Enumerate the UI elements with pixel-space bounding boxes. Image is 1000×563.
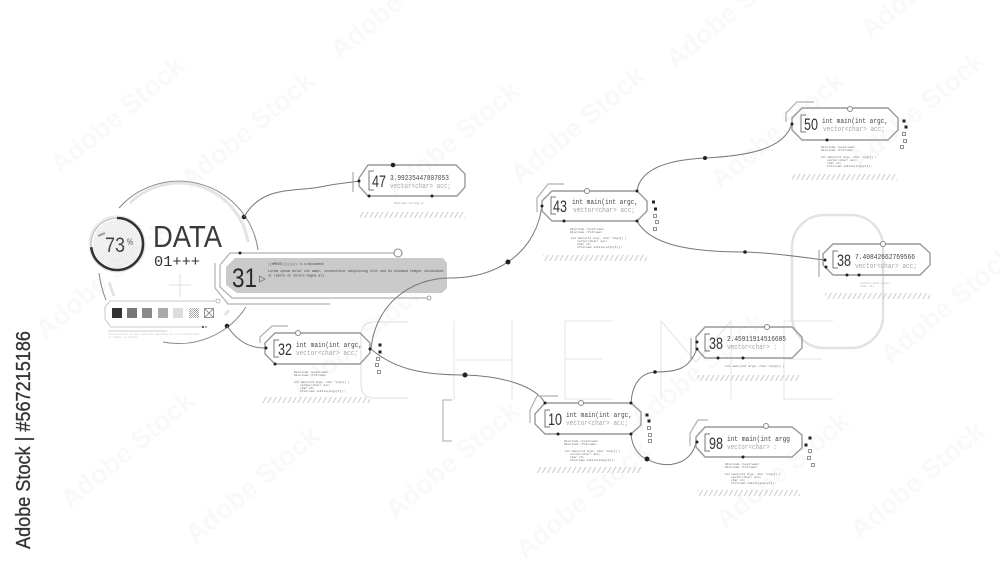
watermark: Adobe Stock pattern: Adobe Stock [845, 415, 991, 545]
card: 47 [353, 163, 465, 218]
gauge: 73 percent: 73 [105, 234, 125, 257]
corner bracket [690, 420, 708, 446]
hatch [792, 174, 897, 180]
code snippet: vector<char> acc; [860, 281, 891, 285]
hatch [697, 490, 800, 496]
panel text [268, 262, 444, 278]
code snippet [564, 439, 621, 462]
code snippet: ifstream inFile(argv[1]); [731, 481, 776, 485]
corner bracket [530, 396, 558, 423]
triangle marker [260, 276, 265, 282]
hatch [825, 293, 930, 299]
connector nodes [462, 156, 747, 462]
code snippet: #include <iostream> [821, 145, 855, 149]
code snippet: #include <iostream> [294, 370, 328, 374]
card: 32 [260, 326, 382, 403]
number 31: 31 [232, 263, 257, 293]
card: 50 [786, 102, 908, 180]
corner bracket [260, 326, 288, 343]
bracket [705, 434, 710, 451]
bracket [274, 340, 279, 357]
vector text: vector<char> acc; [823, 126, 885, 134]
hub nodes [225, 215, 246, 328]
number: 98 [709, 434, 723, 453]
code snippet [294, 370, 350, 393]
nodes [696, 440, 744, 458]
main text: int main(int argc, [566, 412, 632, 420]
code snippet [725, 462, 781, 485]
code snippet: vector<char> acc; [827, 158, 858, 162]
code snippet [860, 281, 891, 288]
stock credit text: Adobe Stock | #567215186 [13, 331, 35, 549]
corner bracket [786, 102, 814, 122]
card: 43 [537, 184, 658, 261]
panel text: Lorem ipsum dolor sit amet, consectetur adipiscing elit sed do eiusmod tempor incididunt [268, 269, 444, 274]
bracket mark [443, 400, 452, 441]
code snippet: char ch; [577, 242, 592, 246]
code snippet: int main(int argc, char *argv[] ) [725, 472, 781, 476]
code snippet: char ch; [300, 386, 315, 390]
hatch [543, 255, 647, 261]
bracket [551, 197, 556, 214]
heading: DATA: DATA [153, 219, 222, 254]
tick [690, 338, 692, 360]
colour palette: ut labore et dolore [108, 335, 138, 339]
colour palette: Lorem ipsum dolor sit amet, consectetur adipiscing elit sed do eiusmod tempor [108, 332, 200, 336]
status squares [646, 414, 652, 442]
letter H [454, 321, 512, 400]
card: 98 [690, 420, 814, 496]
panel text: ut labore et dolore magna ali. [268, 274, 326, 278]
hatch [537, 467, 642, 473]
watermark: Adobe Stock pattern: Adobe Stock [505, 60, 651, 190]
watermark: Adobe Stock pattern: Adobe Stock [55, 385, 201, 515]
number: 38 [709, 334, 723, 353]
card: 10 [530, 396, 652, 473]
code snippet: vector<char> acc; [570, 452, 601, 456]
letter M [661, 321, 731, 399]
number: 10 [548, 410, 562, 429]
panel: data hub [89, 181, 258, 344]
letter E [565, 321, 613, 399]
value text: 2.45911914516605 [727, 336, 786, 344]
watermark: Adobe Stock pattern: Adobe Stock [510, 435, 656, 563]
number: 43 [553, 197, 567, 216]
vector text: vector<char> acc; [573, 207, 635, 215]
main text: int main(int argc, [296, 342, 362, 350]
watermark: Adobe Stock pattern: Adobe Stock [705, 65, 851, 195]
code snippet: vector<char> acc; [577, 239, 608, 243]
bracket [801, 115, 806, 132]
letter O [792, 215, 883, 348]
number: 50 [804, 115, 818, 134]
panel outline [215, 253, 427, 304]
code snippet: #include <iostream> [564, 439, 598, 443]
bracket [545, 410, 550, 427]
status squares [804, 436, 814, 466]
code snippet: #include <iostream> [725, 462, 759, 466]
watermark: Adobe Stock pattern: Adobe Stock [380, 75, 526, 205]
nodes [544, 402, 632, 436]
panel: 31 [215, 249, 447, 304]
code snippet: #include <string.h> [394, 201, 424, 205]
bracket [705, 334, 710, 351]
code snippet: int main(int argc, char *argv[] ) [565, 449, 621, 453]
hub ring [99, 181, 258, 344]
nodes [790, 122, 828, 142]
code snippet: int main(int argc, char *argv[] ) [294, 380, 350, 384]
code snippet: #include <fstream> [725, 465, 758, 469]
colour palette [105, 299, 220, 339]
vector text: vector<char> acc; [566, 420, 628, 428]
hatch [262, 397, 370, 403]
number: 32 [278, 340, 292, 359]
code snippet: #include <fstream> [821, 148, 854, 152]
vector text: vector<char> : [727, 444, 777, 452]
code snippet: char ch; [827, 161, 842, 165]
bracket [369, 171, 374, 190]
code snippet: #include <fstream> [564, 442, 597, 446]
code snippet: char ch; [731, 478, 746, 482]
value text: 3.99235447807053 [390, 175, 449, 183]
panel grey body [226, 258, 447, 293]
main text: int main(int argc, [822, 118, 888, 126]
code snippet [821, 145, 877, 168]
value text: 7.40842662769566 [855, 254, 915, 262]
code snippet: #include <iostream> [570, 227, 604, 231]
vector text: vector<char> : [727, 344, 777, 352]
vector text: vector<char> acc; [855, 263, 917, 271]
watermark: Adobe Stock pattern: Adobe Stock [175, 65, 321, 195]
nodes [696, 340, 744, 360]
main text: int main(int argg [727, 436, 790, 444]
vector text: vector<char> acc; [390, 183, 451, 191]
watermark: Adobe Stock pattern: Adobe Stock [710, 405, 856, 535]
nodes [264, 346, 372, 366]
code snippet: ifstream inFile(argv[1]); [827, 164, 872, 168]
corner bracket [537, 184, 564, 212]
status squares [652, 200, 658, 230]
card: 38 upper [819, 242, 930, 299]
code snippet: int main(int argc, char *argv[] ) [725, 364, 785, 368]
panel text: ||HMODE||||||// x.x/document [268, 262, 324, 267]
number: 38 [837, 251, 851, 270]
connector curves [227, 123, 825, 465]
hatch [360, 212, 465, 218]
gauge: 73 percent: % [127, 237, 133, 247]
code snippet: vector<char> acc; [731, 475, 762, 479]
main text: int main(int argc, [572, 199, 638, 207]
code snippet: vector<char> acc; [300, 383, 331, 387]
watermark: Adobe Stock pattern: Adobe Stock [30, 215, 176, 345]
tick [352, 172, 354, 192]
letter C [361, 322, 408, 398]
panel nodes [238, 249, 431, 300]
number: 47 [372, 172, 386, 191]
code snippet: ifstream inFile(argv[1]); [300, 389, 345, 393]
vector text: vector<char> acc; [296, 350, 358, 358]
code snippet: #include <fstream> [570, 230, 603, 234]
letter E right [784, 321, 833, 399]
code snippet: ifstream inFile(argv[1]); [570, 458, 615, 462]
watermark: Adobe Stock pattern: Adobe Stock [180, 420, 326, 550]
nodes [358, 163, 434, 198]
status squares [900, 120, 908, 148]
card: 38 lower [691, 324, 802, 381]
code snippet: char ch; [570, 455, 585, 459]
watermark: Adobe Stock pattern: Adobe Stock [285, 275, 431, 405]
watermark: Adobe Stock pattern: Adobe Stock [845, 45, 991, 175]
bracket [833, 251, 838, 268]
code snippet: #include <fstream> [294, 373, 327, 377]
code snippet: char ch; [860, 284, 875, 288]
code snippet: ifstream inFile(argv[1]); [577, 245, 622, 249]
watermark: Adobe Stock pattern: Adobe Stock [625, 305, 771, 435]
subheading: 01+++: 01+++ [154, 254, 200, 271]
nodes [540, 190, 638, 222]
watermark: Adobe Stock pattern: Adobe Stock [380, 395, 526, 525]
tick [818, 250, 820, 277]
background outline letters [361, 215, 883, 400]
hatch [697, 375, 800, 381]
code snippet: int main(int argc, char *argv[] ) [571, 236, 627, 240]
code snippet [570, 227, 627, 249]
nodes [824, 258, 860, 276]
gauge: 73 percent [89, 216, 145, 272]
code snippet: int main(int argc, char *argv[] ) [821, 155, 877, 159]
status squares [376, 344, 382, 374]
watermark: Adobe Stock pattern: Adobe Stock [45, 50, 191, 180]
